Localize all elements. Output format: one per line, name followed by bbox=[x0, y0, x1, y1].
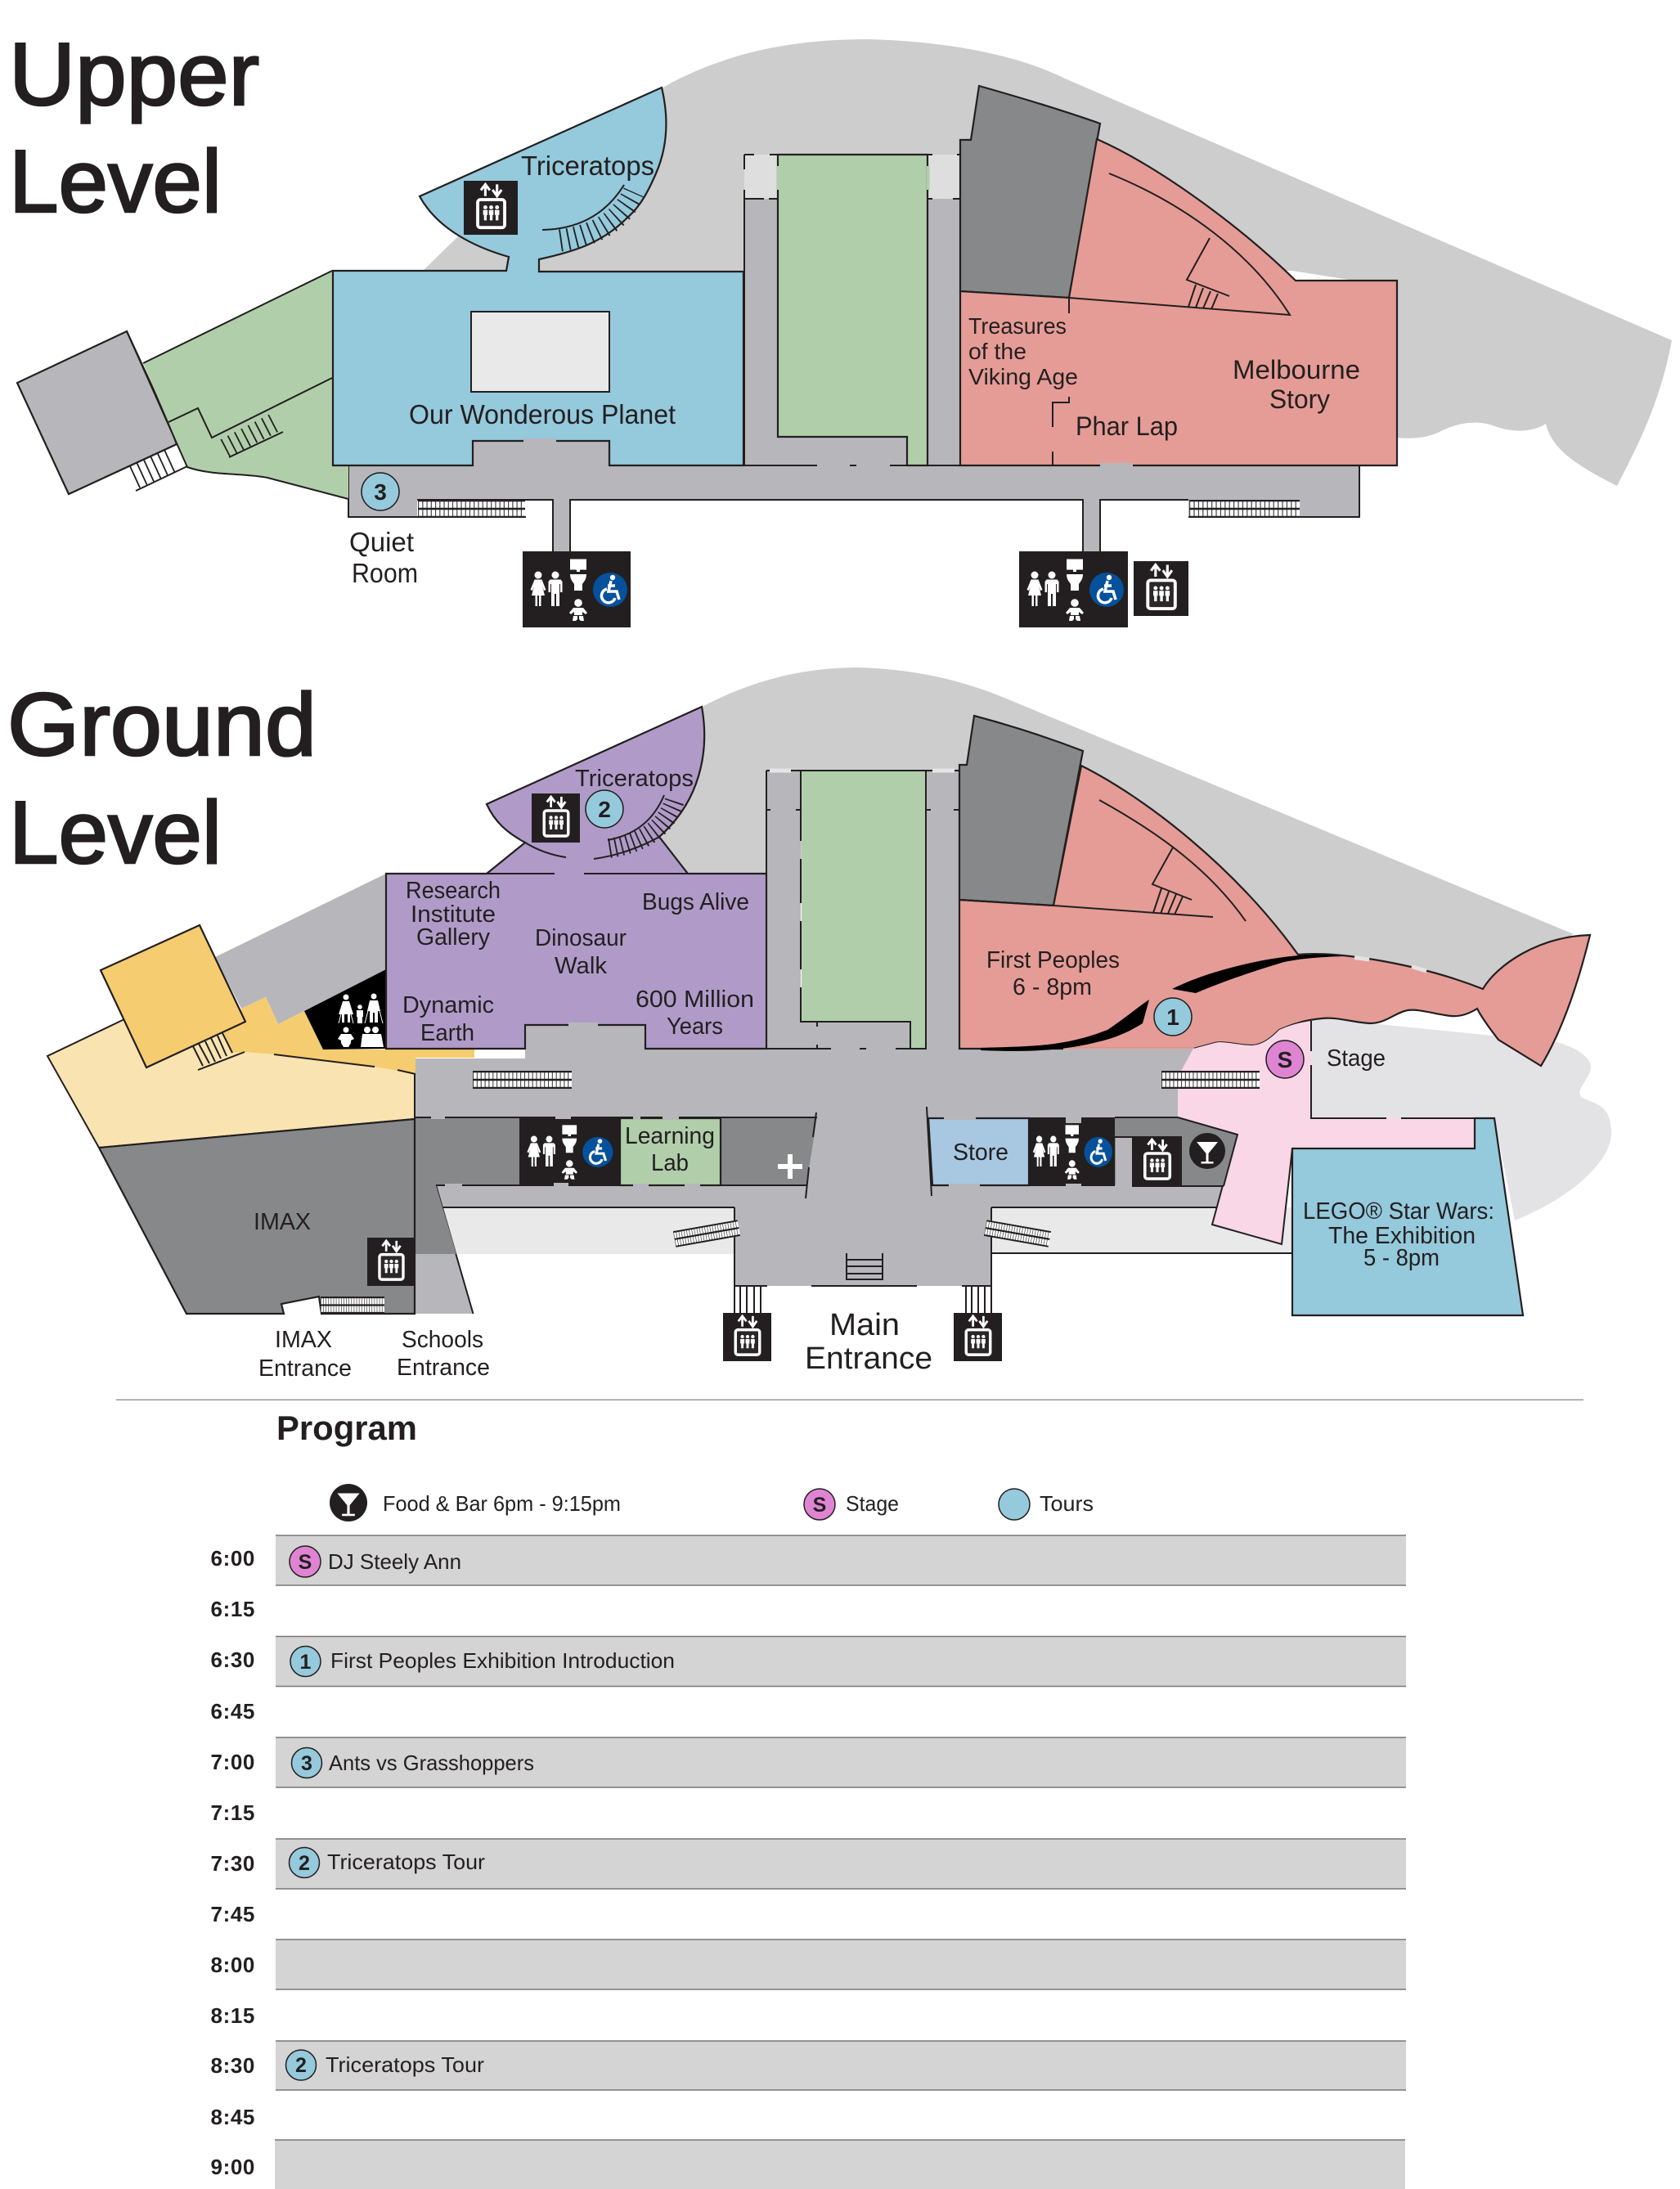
ground level labels: Walk bbox=[555, 953, 607, 979]
time labels: 8:30 bbox=[211, 2053, 255, 2078]
program schedule bbox=[116, 1399, 1583, 2189]
legend: Stage bbox=[846, 1491, 899, 1516]
ground level labels: Triceratops bbox=[575, 766, 694, 792]
time labels: 6:00 bbox=[211, 1546, 255, 1571]
ground level labels: 5 - 8pm bbox=[1363, 1245, 1440, 1271]
escalator upper left bbox=[418, 500, 525, 518]
legend: Food & Bar 6pm - 9:15pm bbox=[383, 1491, 621, 1516]
row: DJ Steely Ann: DJ Steely Ann bbox=[328, 1549, 461, 1574]
ground level labels: Learning bbox=[625, 1123, 715, 1149]
ground level labels: Research bbox=[406, 878, 501, 904]
ground level labels: IMAX bbox=[254, 1209, 311, 1235]
icon: toilets left bbox=[523, 551, 631, 627]
stage marker bbox=[1266, 1041, 1304, 1078]
ground level labels: Bugs Alive bbox=[642, 889, 749, 915]
time labels: 9:00 bbox=[211, 2155, 255, 2179]
room: Our Wonderous Planet and Triceratops bbox=[333, 88, 743, 465]
icon: lift upper right bbox=[1134, 561, 1188, 616]
ground level labels: Gallery bbox=[416, 924, 490, 951]
room: green gallery west bbox=[127, 271, 348, 499]
ground level map bbox=[47, 667, 1611, 1382]
icon: first aid plus bbox=[778, 1154, 802, 1179]
time labels: 7:15 bbox=[211, 1800, 255, 1825]
white void bbox=[471, 312, 609, 392]
icon: lift Triceratops ground bbox=[532, 793, 580, 843]
room: light yellow entrance zone bbox=[47, 1019, 415, 1148]
row: DJ Steely Ann bbox=[290, 1546, 461, 1577]
time labels bbox=[211, 1546, 255, 2179]
upper level labels bbox=[349, 151, 1360, 588]
legend: S bbox=[813, 1494, 826, 1517]
ground level labels: Lab bbox=[651, 1150, 689, 1176]
ground level building silhouette bbox=[659, 667, 1574, 989]
escalators and stairs bbox=[321, 1071, 1260, 1314]
tour marker 3 bbox=[362, 473, 399, 510]
door gaps bbox=[1100, 463, 1133, 468]
stage hall background bbox=[1311, 1018, 1611, 1220]
tour marker 2: 2 bbox=[598, 797, 611, 822]
title: Ground Level: Ground bbox=[7, 675, 317, 775]
row: Triceratops Tour 8:30: Triceratops Tour bbox=[326, 2052, 484, 2077]
upper level labels: Our Wonderous Planet bbox=[409, 399, 676, 429]
escalator upper right bbox=[1189, 500, 1300, 518]
purple galleries inner walls bbox=[487, 795, 688, 1027]
green gallery edge lines bbox=[791, 771, 932, 1049]
icon: toilets right bbox=[1019, 551, 1128, 627]
row: Triceratops Tour 8:30: 2 bbox=[295, 2054, 307, 2077]
stairs west upper bbox=[225, 422, 283, 457]
row: Ants vs Grasshoppers bbox=[291, 1747, 534, 1778]
time labels: 7:30 bbox=[211, 1851, 255, 1876]
ground level labels: Dinosaur bbox=[535, 925, 627, 951]
upper level labels: Phar Lap bbox=[1076, 411, 1178, 441]
foyer walls bbox=[1212, 1021, 1475, 1244]
row: Triceratops Tour 8:30 bbox=[286, 2050, 484, 2080]
row: Triceratops Tour 7:30: 2 bbox=[299, 1852, 310, 1875]
ground level labels: Stage bbox=[1327, 1045, 1386, 1072]
west grey wedge bbox=[215, 874, 386, 1024]
title: Ground Level: Level bbox=[9, 783, 222, 883]
row: Ants vs Grasshoppers: 3 bbox=[301, 1752, 312, 1775]
time labels: 7:00 bbox=[211, 1750, 255, 1774]
room: purple galleries bbox=[386, 707, 766, 1049]
stairs west lower bbox=[134, 459, 187, 491]
ground level labels: Schools bbox=[402, 1327, 483, 1353]
ground level corridors and main hall bbox=[415, 771, 1292, 1314]
upper level building silhouette bbox=[423, 39, 1672, 486]
row: First Peoples Exhibition Introduction: 1 bbox=[300, 1651, 312, 1674]
black whale outline swoosh bbox=[981, 955, 1344, 1051]
upper level labels: Melbourne bbox=[1233, 355, 1360, 384]
tour marker 3: 3 bbox=[374, 479, 387, 505]
icon: lift bar wing bbox=[1132, 1136, 1182, 1185]
icon: lift Triceratops bbox=[464, 181, 518, 235]
icon: family facilities bbox=[304, 969, 386, 1050]
ground level labels: The Exhibition bbox=[1328, 1223, 1476, 1249]
time labels: 6:30 bbox=[211, 1647, 255, 1672]
icon: lift IMAX bbox=[367, 1238, 415, 1286]
ground level labels: Main bbox=[829, 1308, 900, 1342]
room: bar wing dark grey bbox=[1115, 1117, 1238, 1187]
room: green gallery central bbox=[802, 771, 925, 1048]
ground level labels: Earth bbox=[420, 1020, 474, 1046]
time labels: 8:45 bbox=[211, 2105, 255, 2129]
stairs yellow block bbox=[193, 1033, 245, 1070]
ground level labels: Institute bbox=[411, 901, 496, 928]
icon: lift main left bbox=[723, 1313, 771, 1361]
time labels: 6:15 bbox=[211, 1597, 255, 1621]
room: green gallery central bbox=[777, 155, 929, 465]
dark grey corridor with learning lab bbox=[415, 1107, 932, 1254]
time labels: 8:00 bbox=[211, 1953, 255, 1977]
ground level labels: Entrance bbox=[805, 1342, 932, 1376]
icon: lift main right bbox=[954, 1313, 1002, 1361]
icon: toilets ground left bbox=[519, 1117, 620, 1186]
title: Upper Level bbox=[9, 25, 259, 231]
upper level labels: Story bbox=[1269, 384, 1330, 414]
upper level labels: Room bbox=[352, 558, 418, 588]
upper level labels: Triceratops bbox=[521, 151, 654, 181]
title: Upper Level: Level bbox=[9, 132, 222, 231]
row: Triceratops Tour 7:30 bbox=[290, 1847, 485, 1878]
tour marker 1: 1 bbox=[1166, 1005, 1179, 1030]
schedule row rules bbox=[275, 1535, 1406, 2140]
stairs in Triceratops bbox=[542, 185, 634, 240]
tour marker 2 bbox=[586, 790, 623, 828]
forecourt panes bbox=[442, 1207, 1294, 1254]
room: Melbourne Story bbox=[960, 139, 1397, 465]
ground level labels: First Peoples bbox=[986, 947, 1120, 973]
icon: toilets ground right bbox=[1029, 1117, 1115, 1186]
upper level corridors bbox=[348, 155, 1359, 551]
room: First Peoples bbox=[959, 766, 1590, 1066]
room: yellow block bbox=[101, 925, 245, 1068]
room: Store bbox=[928, 1118, 1029, 1185]
room: grey block at far left bbox=[17, 331, 177, 494]
ground level labels bbox=[254, 766, 1494, 1382]
room: orange zone bbox=[223, 997, 474, 1074]
upper level map bbox=[17, 39, 1672, 627]
room: Learning Lab bbox=[620, 1118, 721, 1185]
time labels: 6:45 bbox=[211, 1699, 255, 1724]
ground level labels: 600 Million bbox=[636, 987, 754, 1013]
title: Ground Level bbox=[7, 675, 317, 883]
door gaps bbox=[523, 438, 556, 443]
light upper voids bbox=[744, 155, 960, 199]
row: Triceratops Tour 7:30: Triceratops Tour bbox=[327, 1850, 485, 1874]
room: LEGO Star Wars bbox=[1292, 1118, 1523, 1315]
room: dark grey block bbox=[959, 716, 1083, 906]
row: First Peoples Exhibition Introduction: First Peoples Exhibition Introduction bbox=[330, 1648, 675, 1673]
time labels: 7:45 bbox=[211, 1902, 255, 1926]
Melbourne Story inner walls bbox=[1053, 173, 1290, 465]
time labels: 8:15 bbox=[211, 2003, 255, 2028]
First Peoples inner walls bbox=[959, 800, 1426, 1050]
upper level labels: Quiet bbox=[349, 527, 414, 557]
ground level labels: Years bbox=[667, 1014, 723, 1040]
upper level labels: of the bbox=[968, 339, 1026, 364]
title: Upper Level: Upper bbox=[9, 25, 259, 124]
light doors on top of the central corridors bbox=[770, 769, 955, 772]
ground level labels: Entrance bbox=[258, 1355, 352, 1382]
ground level labels: Store bbox=[953, 1139, 1008, 1166]
ground level labels: Entrance bbox=[397, 1355, 490, 1381]
ground level labels: Dynamic bbox=[402, 992, 494, 1018]
stage marker: S bbox=[1278, 1047, 1292, 1072]
room: stage foyer pink bbox=[1178, 1021, 1475, 1244]
row: DJ Steely Ann: S bbox=[299, 1551, 312, 1574]
ground level labels: IMAX bbox=[275, 1327, 332, 1353]
ground level labels: LEGO® Star Wars: bbox=[1303, 1198, 1494, 1225]
upper level labels: Viking Age bbox=[968, 364, 1078, 389]
corridor door gaps bbox=[431, 1114, 1081, 1187]
legend bbox=[330, 1484, 1094, 1522]
tour marker 1 bbox=[1154, 998, 1192, 1036]
legend: Tours bbox=[1040, 1491, 1094, 1516]
upper level labels: Treasures bbox=[968, 313, 1067, 339]
room: IMAX bbox=[99, 1119, 415, 1314]
icon: bar bbox=[1189, 1133, 1225, 1169]
ground level labels: 6 - 8pm bbox=[1013, 974, 1092, 1000]
heading: Program: Program bbox=[276, 1409, 417, 1447]
row: Ants vs Grasshoppers: Ants vs Grasshoppers bbox=[329, 1751, 534, 1775]
schedule row bars bbox=[275, 1535, 1406, 2189]
room: dark grey block bbox=[960, 86, 1100, 298]
